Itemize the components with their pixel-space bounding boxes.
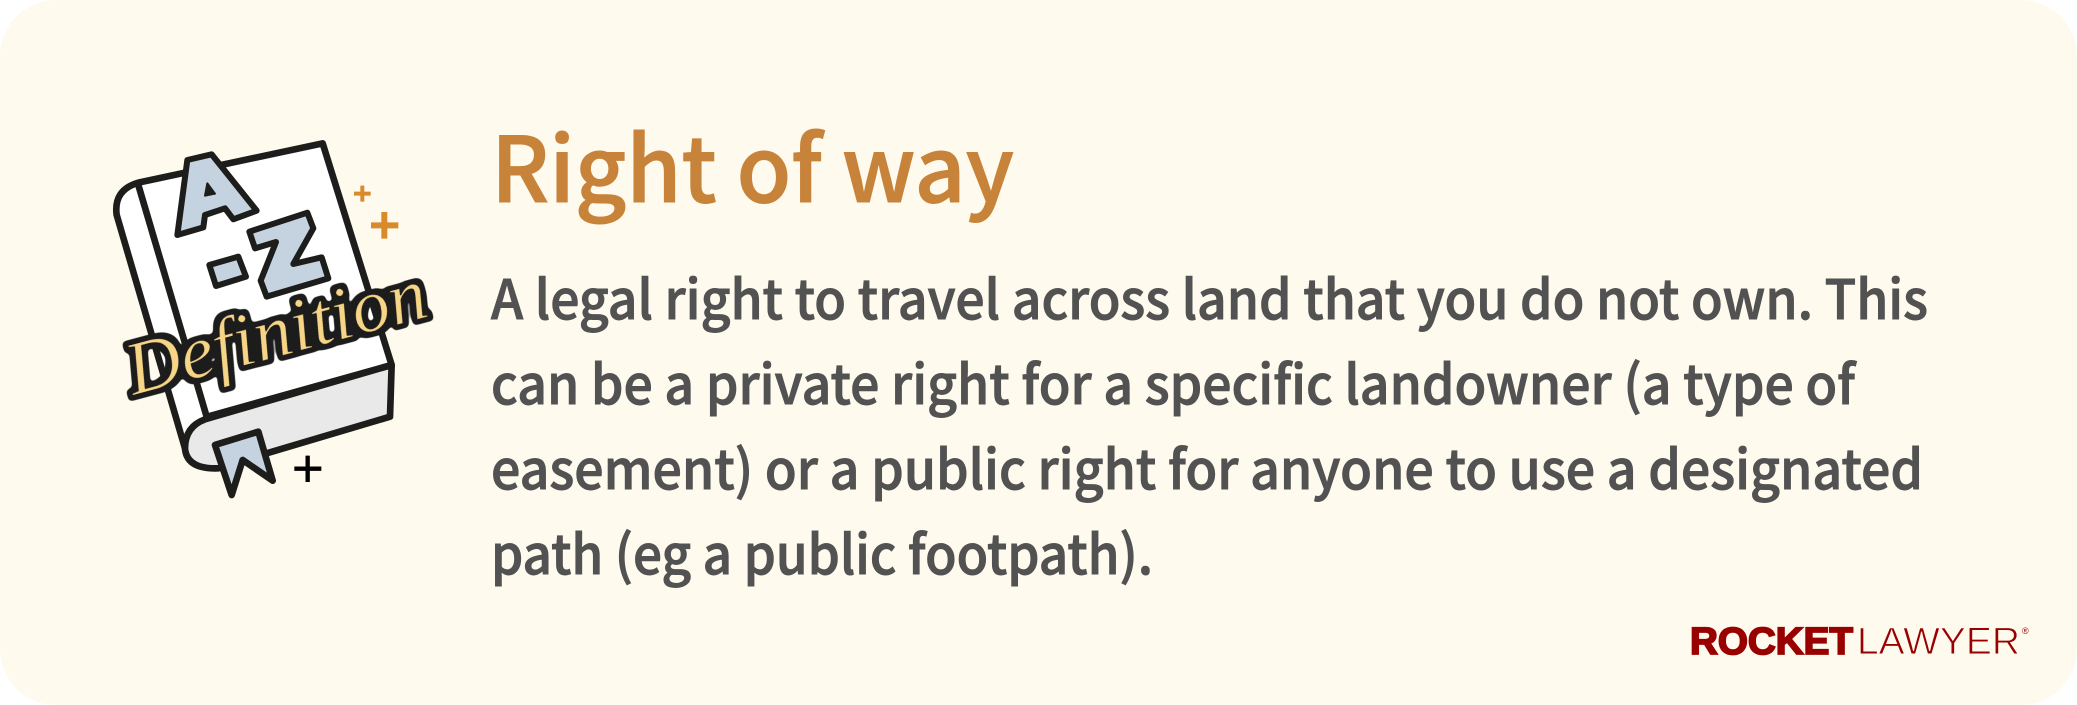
logo: Rocket Lawyer: [1690, 621, 2029, 663]
line 1: A legal right to travel across land that you do not own. This: [491, 256, 1928, 335]
letter Z: [249, 213, 328, 297]
icon: A-Z definition book: [115, 143, 436, 495]
line 2: can be a private right for a specific landowner (a type of: [491, 341, 1857, 420]
script word: Definition: Definition: [115, 252, 436, 412]
line 3: easement) or a public right for anyone to use a designated: [491, 426, 1923, 505]
registered mark: ®: [2022, 626, 2029, 636]
hyphen: [209, 257, 246, 286]
orange small plus: [354, 186, 371, 202]
book spine line: [138, 185, 207, 417]
definition text: [491, 256, 1928, 590]
bookmark: [215, 432, 273, 495]
letter A: [177, 154, 257, 235]
title: Right of way: [491, 98, 1014, 228]
logo word ROCKET: ROCKET: [1690, 621, 1853, 663]
book pages: [185, 365, 392, 468]
logo word LAWYER: LAWYER: [1857, 621, 2020, 663]
line 4: path (eg a public footpath).: [491, 511, 1153, 590]
orange large plus: [371, 212, 398, 239]
black plus: [294, 456, 321, 482]
letter A counter: [205, 183, 215, 196]
book cover: [116, 143, 392, 448]
